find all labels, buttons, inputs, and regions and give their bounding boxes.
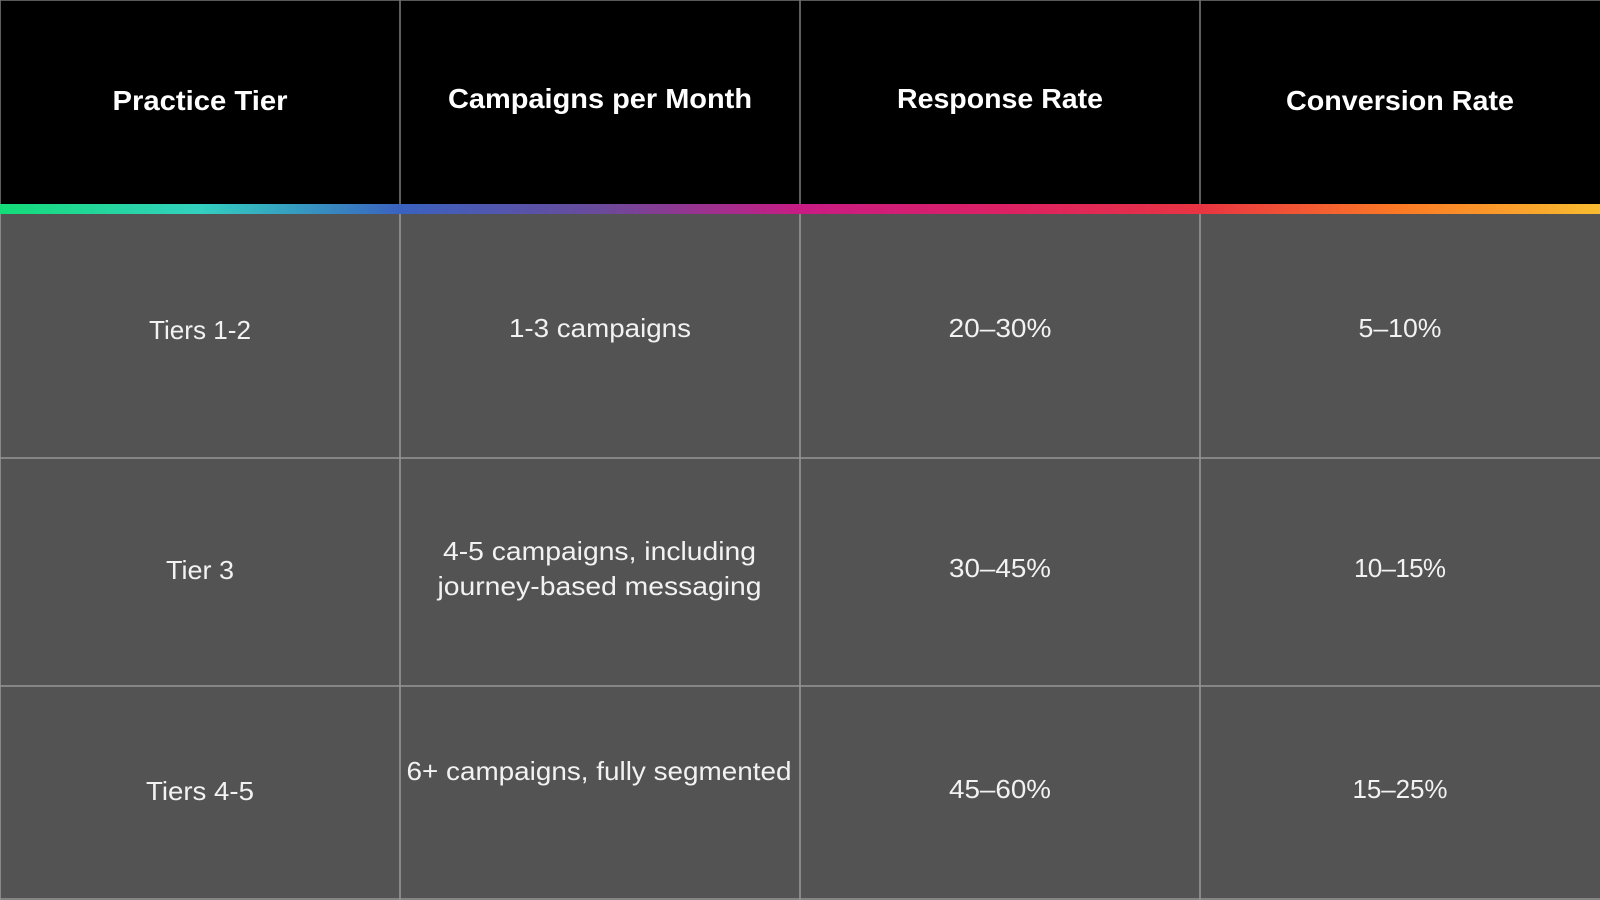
cell: response rate: 20–30%	[948, 313, 1052, 343]
cell: response rate: 45–60%	[949, 774, 1051, 804]
cell: tier name: Tiers 1-2	[149, 315, 251, 345]
cell: campaigns: journey-based messaging	[436, 571, 762, 601]
rainbow gradient divider	[0, 204, 1600, 214]
cell: tier name: Tier 3	[166, 555, 234, 585]
header row	[112, 83, 1514, 116]
row: Tiers 4-5	[146, 756, 1448, 806]
heading: Response Rate: Response Rate	[897, 83, 1103, 114]
row: Tiers 1-2	[149, 313, 1442, 345]
row: Tier 3	[166, 536, 1446, 601]
cell: campaigns: 4-5 campaigns, including	[443, 536, 756, 566]
heading: Practice Tier: Practice Tier	[112, 85, 288, 116]
cell: campaigns: 1-3 campaigns	[509, 313, 691, 343]
table body background	[0, 214, 1600, 900]
cell: conversion rate: 5–10%	[1358, 313, 1442, 343]
heading: Campaigns per Month: Campaigns per Month	[448, 83, 752, 114]
heading: Conversion Rate: Conversion Rate	[1286, 85, 1514, 116]
cell: campaigns: 6+ campaigns, fully segmented	[406, 756, 792, 786]
cell: conversion rate: 10–15%	[1354, 553, 1446, 583]
cell: tier name: Tiers 4-5	[146, 776, 254, 806]
cell: response rate: 30–45%	[949, 553, 1051, 583]
header background	[0, 0, 1600, 204]
cell: conversion rate: 15–25%	[1352, 774, 1448, 804]
cell: campaigns	[436, 536, 762, 601]
